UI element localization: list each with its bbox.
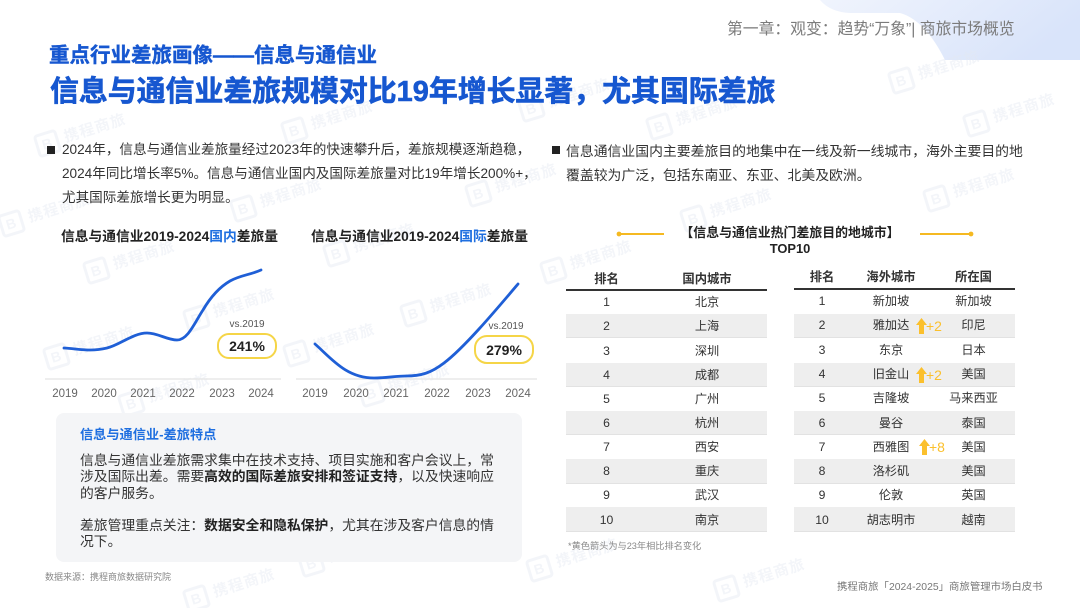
left bullet text	[47, 142, 537, 205]
table: overseas cities: 美国	[961, 440, 986, 454]
table: domestic cities: 9	[603, 488, 610, 502]
table title: 【信息与通信业热门差旅目的地城市】	[680, 225, 900, 240]
table: overseas cities: 2	[819, 318, 825, 332]
table title: TOP10	[770, 241, 810, 256]
table: domestic cities: 武汉	[695, 488, 719, 502]
text: B	[329, 244, 344, 263]
table: overseas cities: 胡志明市	[867, 513, 915, 527]
text: B	[546, 261, 561, 280]
text: B	[89, 261, 104, 280]
table: overseas cities: 5	[819, 391, 825, 405]
line chart: domestic: 2020	[91, 388, 117, 400]
table: domestic cities: 成都	[695, 368, 719, 382]
table: domestic cities: 5	[603, 392, 610, 406]
rank change: Seattle +8: +8	[929, 439, 945, 455]
callout: domestic growth 241%: 241%	[229, 338, 265, 354]
table: overseas cities: 7	[819, 440, 825, 454]
panel text	[80, 453, 494, 549]
text: 携程商旅	[326, 531, 392, 566]
text: B	[719, 579, 734, 598]
chart title: international: 信息与通信业2019-2024国际差旅量	[311, 229, 528, 244]
table: domestic cities: 3	[603, 344, 610, 358]
text: 携程商旅	[708, 186, 774, 221]
panel heading: 信息与通信业-差旅特点	[80, 427, 216, 442]
line chart: domestic: 2023	[209, 388, 235, 400]
table: domestic cities	[566, 272, 767, 532]
left bullet text: 2024年同比增长率5%。信息与通信业国内及国际差旅量对比19年增长200%+，	[62, 166, 537, 181]
panel text: 涉及国际出差。需要高效的国际差旅安排和签证支持，以及快速响应	[80, 469, 494, 484]
text: 携程商旅	[546, 76, 612, 111]
table: domestic cities: 排名	[594, 272, 619, 286]
line chart: domestic: 2022	[169, 388, 195, 400]
table: overseas cities: 英国	[961, 488, 986, 502]
line chart: international: 2021	[383, 388, 409, 400]
table: overseas cities: 3	[819, 343, 825, 357]
rank change: Jakarta +2: +2	[926, 318, 942, 334]
text: 携程商旅	[674, 94, 740, 129]
section heading: 重点行业差旅画像——信息与通信业	[49, 44, 377, 67]
panel: industry characteristics	[56, 413, 522, 562]
right bullet text	[552, 143, 1023, 183]
table: overseas cities: 美国	[961, 464, 986, 478]
line chart: international: 2022	[424, 388, 450, 400]
panel text: 差旅管理重点关注：数据安全和隐私保护，尤其在涉及客户信息的情	[80, 518, 494, 533]
line chart: domestic: 2019	[52, 388, 78, 400]
table: domestic cities: 深圳	[695, 344, 719, 358]
text: 携程商旅	[741, 556, 807, 591]
report name footer: 携程商旅「2024-2025」商旅管理市场白皮书	[837, 582, 1043, 593]
text: B	[49, 347, 64, 366]
text: B	[189, 309, 204, 328]
text: 携程商旅	[26, 191, 92, 226]
text: B	[289, 344, 304, 363]
right bullet text: 信息通信业国内主要差旅目的地集中在一线及新一线城市，海外主要目的地	[566, 143, 1023, 159]
table: overseas cities: 日本	[961, 343, 986, 357]
table: overseas cities: 排名	[810, 270, 834, 284]
text: 携程商旅	[146, 371, 212, 406]
text: 携程商旅	[554, 536, 620, 571]
line chart: international: 2020	[343, 388, 369, 400]
text: 携程商旅	[493, 161, 559, 196]
table: overseas cities: 4	[819, 367, 825, 381]
table: domestic cities: 2	[603, 319, 610, 333]
table: overseas cities: 洛杉矶	[873, 464, 909, 478]
chart title: domestic: 信息与通信业2019-2024国内差旅量	[61, 229, 278, 244]
text: 携程商旅	[351, 221, 417, 256]
rank change: San Francisco +2	[916, 367, 942, 383]
table: overseas cities: 马来西亚	[949, 391, 998, 405]
text: B	[189, 589, 204, 608]
text: B	[524, 99, 539, 118]
table title	[680, 225, 900, 256]
text: 携程商旅	[111, 238, 177, 273]
table: overseas cities: 吉隆坡	[873, 391, 909, 405]
panel text: 信息与通信业差旅需求集中在技术支持、项目实施和客户会议上，常	[80, 453, 494, 468]
table: overseas cities	[794, 270, 1015, 532]
callout: domestic growth 241%	[217, 319, 277, 359]
table: domestic cities: 10	[600, 513, 613, 527]
table: overseas cities: 美国	[961, 367, 986, 381]
arrow: left decoration	[616, 232, 664, 236]
table: overseas cities: 印尼	[961, 318, 986, 332]
text: B	[40, 134, 55, 153]
panel text: 况下。	[80, 534, 121, 549]
table: overseas cities: 8	[819, 464, 825, 478]
table: overseas cities: 10	[815, 513, 829, 527]
callout: domestic growth 241%: vs.2019	[229, 319, 265, 330]
table: domestic cities: 南京	[695, 513, 719, 527]
table: overseas cities: 东京	[879, 343, 903, 357]
right bullet text: 覆盖较为广泛，包括东南亚、东亚、北美及欧洲。	[566, 167, 871, 183]
text: 携程商旅	[211, 286, 277, 321]
table: domestic cities: 杭州	[695, 416, 719, 430]
table: domestic cities: 广州	[695, 392, 719, 406]
table: overseas cities: 泰国	[961, 416, 986, 430]
table: overseas cities: 新加坡	[955, 294, 992, 308]
table: overseas cities: 雅加达	[873, 318, 909, 332]
line chart: international: 2019	[302, 388, 328, 400]
line chart: domestic: 2024	[248, 388, 274, 400]
text: B	[686, 209, 701, 228]
table: domestic cities: 西安	[695, 440, 719, 454]
line chart: international	[296, 282, 537, 400]
line chart: domestic	[45, 268, 281, 400]
table: domestic cities: 7	[603, 440, 610, 454]
text: B	[236, 199, 251, 218]
callout: international growth 279%: 279%	[486, 342, 522, 358]
callout: international growth 279%	[474, 321, 534, 364]
table: overseas cities: 海外城市	[866, 270, 916, 284]
source note: 数据来源：携程商旅数据研究院	[45, 572, 171, 582]
arrow: right decoration	[920, 232, 974, 236]
table: overseas cities: 伦敦	[879, 488, 903, 502]
table: domestic cities: 6	[603, 416, 610, 430]
rank change: Seattle +8	[919, 439, 945, 455]
text: B	[4, 214, 19, 233]
text: B	[969, 114, 984, 133]
left bullet text: 尤其国际差旅增长更为明显。	[62, 190, 239, 205]
text: 携程商旅	[211, 566, 277, 601]
text: 携程商旅	[309, 98, 375, 133]
text: 携程商旅	[386, 361, 452, 396]
text: B	[304, 554, 319, 573]
left bullet text: 2024年，信息与通信业差旅量经过2023年的快速攀升后，差旅规模逐渐趋稳，	[62, 142, 530, 157]
table: overseas cities: 新加坡	[873, 294, 909, 308]
callout: international growth 279%: vs.2019	[488, 321, 524, 332]
table: overseas cities: 旧金山	[873, 367, 909, 381]
text: 携程商旅	[311, 321, 377, 356]
table: domestic cities: 重庆	[695, 464, 719, 478]
line chart: international: 2023	[465, 388, 491, 400]
text: B	[929, 189, 944, 208]
table: overseas cities: 9	[819, 488, 825, 502]
text: B	[652, 117, 667, 136]
line chart: international: 2024	[505, 388, 531, 400]
text: B	[532, 559, 547, 578]
text: 携程商旅	[916, 48, 982, 83]
text: B	[124, 394, 139, 413]
text: 携程商旅	[428, 281, 494, 316]
table: domestic cities: 8	[603, 464, 610, 478]
table: overseas cities: 所在国	[955, 270, 992, 284]
text: 携程商旅	[951, 166, 1017, 201]
main title: 信息与通信业差旅规模对比19年增长显著，尤其国际差旅	[50, 76, 776, 108]
table: domestic cities: 北京	[695, 295, 719, 309]
text: 携程商旅	[71, 324, 137, 359]
chapter header: 第一章：观变：趋势“万象”| 商旅市场概览	[727, 21, 1015, 38]
text: B	[406, 304, 421, 323]
text: 携程商旅	[62, 111, 128, 146]
table: overseas cities: 西雅图	[873, 440, 909, 454]
table footnote: *黄色箭头为与23年相比排名变化	[568, 541, 701, 551]
table: domestic cities: 国内城市	[682, 272, 732, 286]
table: overseas cities: 越南	[961, 513, 986, 527]
panel text: 的客户服务。	[80, 486, 163, 501]
text: 携程商旅	[258, 176, 324, 211]
rank change: San Francisco +2: +2	[926, 367, 942, 383]
table: overseas cities: 6	[819, 416, 825, 430]
table: overseas cities: 曼谷	[879, 416, 903, 430]
text: 携程商旅	[568, 238, 634, 273]
text: B	[471, 184, 486, 203]
text: 携程商旅	[991, 91, 1057, 126]
text: B	[894, 71, 909, 90]
table: domestic cities: 上海	[695, 319, 719, 333]
table: domestic cities: 1	[603, 295, 610, 309]
rank change: Jakarta +2	[916, 318, 942, 334]
line chart: domestic: 2021	[130, 388, 156, 400]
table: overseas cities: 1	[819, 294, 825, 308]
text: B	[287, 121, 302, 140]
table: domestic cities: 4	[603, 368, 610, 382]
text: B	[364, 384, 379, 403]
